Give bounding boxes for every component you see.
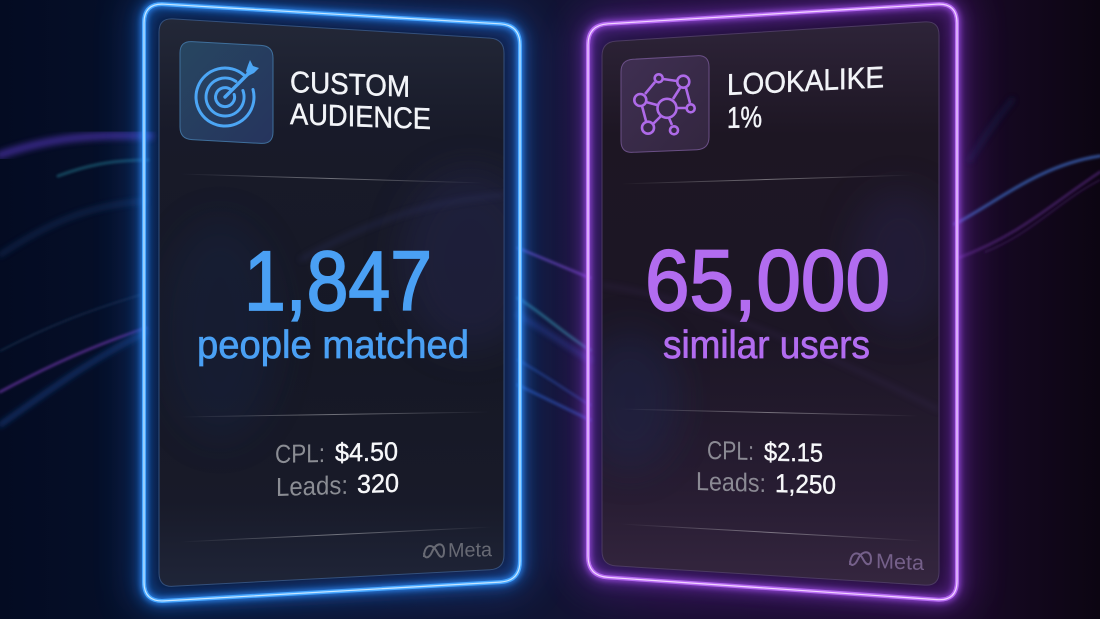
- heading: lookalike 1%: 1%: [727, 101, 762, 135]
- brand: meta: Meta: [876, 550, 924, 575]
- panel: custom audience: [144, 4, 540, 601]
- metric: 65,000 similar users: similar users: [663, 324, 870, 367]
- inner glass card: [602, 22, 939, 585]
- brand: meta: [424, 539, 493, 562]
- stats: CPL and leads: CPL:: [707, 435, 754, 466]
- stats: CPL and leads: 320: [357, 468, 399, 499]
- metric: 65,000 similar users: [645, 233, 890, 367]
- card tint and faint waves: [170, 173, 504, 422]
- divider: [620, 524, 923, 541]
- stats: CPL and leads: Leads:: [696, 466, 766, 498]
- brand: meta: Meta: [448, 539, 493, 562]
- heading: lookalike 1%: LOOKALIKE: [727, 61, 884, 102]
- stats: CPL and leads: [696, 435, 836, 500]
- heading: lookalike 1%: [727, 61, 884, 135]
- card tint and faint waves: [580, 190, 950, 470]
- metric: 1,847 people matched: [197, 234, 469, 367]
- inner glass card: [159, 19, 504, 586]
- stats: CPL and leads: $4.50: [335, 436, 398, 467]
- divider: [620, 409, 920, 416]
- metric: 65,000 similar users: 65,000: [645, 233, 890, 329]
- heading: custom audience: [290, 66, 431, 136]
- icon tile: target: [180, 42, 273, 143]
- metric: 1,847 people matched: 1,847: [244, 234, 432, 328]
- neon frame: blue: [144, 4, 520, 601]
- divider: [180, 174, 484, 183]
- icon tile: network: [621, 56, 709, 152]
- stats: CPL and leads: Leads:: [276, 470, 348, 502]
- divider: [620, 175, 913, 184]
- stats: CPL and leads: 1,250: [775, 468, 836, 500]
- heading: custom audience: AUDIENCE: [290, 98, 431, 136]
- heading: custom audience: CUSTOM: [290, 66, 410, 104]
- metric: 1,847 people matched: people matched: [197, 324, 469, 367]
- stats: CPL and leads: [275, 436, 399, 502]
- divider: [180, 412, 490, 417]
- brand: meta: [850, 550, 924, 575]
- panel: lookalike 1%: [580, 4, 957, 600]
- divider: [180, 527, 493, 542]
- neon frame: purple: [588, 4, 957, 600]
- background light waves: [0, 100, 1100, 425]
- stats: CPL and leads: CPL:: [275, 438, 325, 469]
- stats: CPL and leads: $2.15: [764, 437, 823, 468]
